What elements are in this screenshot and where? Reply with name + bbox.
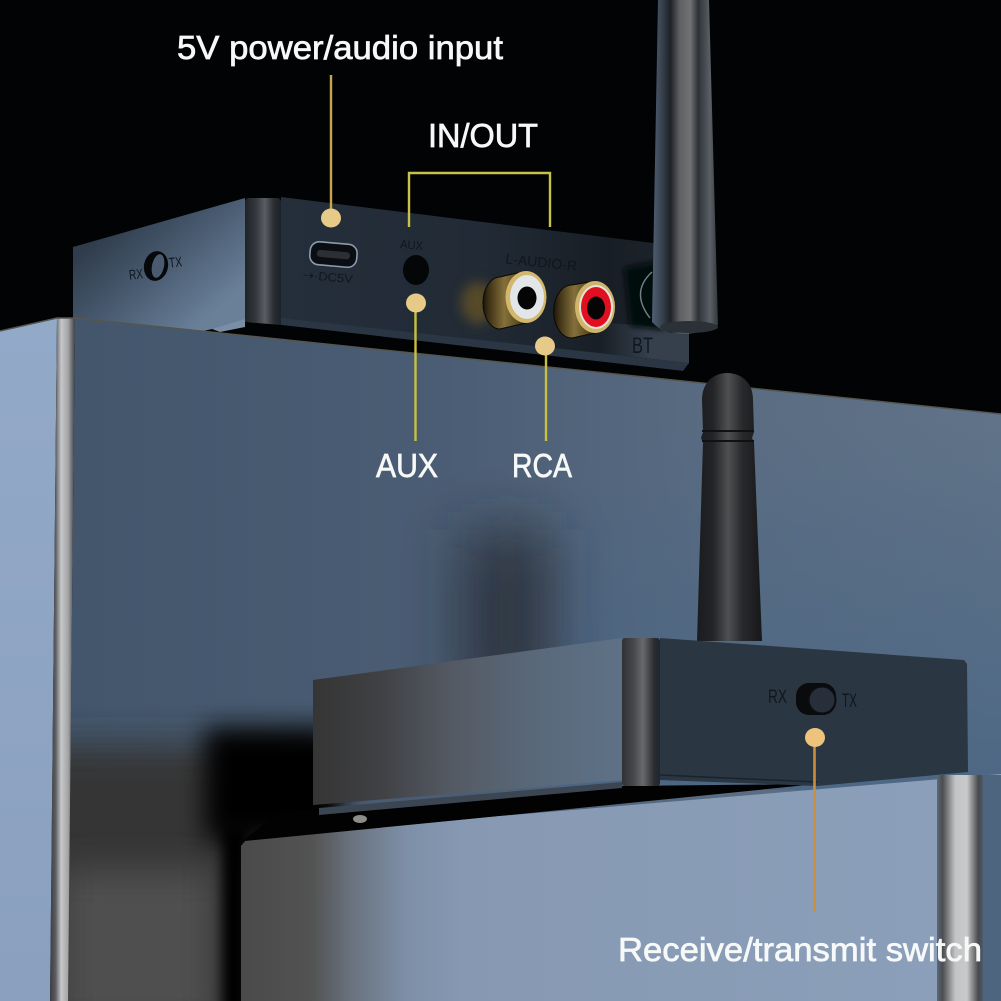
main shelf: bluer lower right tone — [560, 420, 1001, 790]
lower shelf: gap shadow — [241, 784, 817, 842]
top device: light lip at the corner — [212, 319, 245, 332]
top device: front face — [281, 197, 689, 370]
top device: BT label: BT — [632, 333, 653, 358]
top device: AUX jack — [403, 255, 429, 285]
callout: Receive/transmit switch — [618, 728, 982, 968]
top device: left side face — [73, 198, 245, 345]
lower device: box with RX/TX switch — [313, 638, 968, 823]
main shelf: left side panel — [0, 318, 57, 1001]
callout: 5V power/audio input — [177, 29, 503, 228]
main shelf: front face — [68, 318, 1001, 1001]
top device: contact shadow — [203, 322, 686, 384]
top device: RX/TX switch — [128, 249, 183, 283]
top device: AUX label: AUX — [399, 237, 424, 253]
lower shelf: right side strip — [983, 775, 1001, 1001]
top device: USB-C port — [309, 241, 358, 268]
top device: lighter lower-right area — [600, 322, 689, 363]
top device: right RCA socket (red) — [554, 281, 615, 338]
callout: 5V power/audio input: 5V power/audio input — [177, 29, 503, 66]
top device: BT antenna connector — [624, 260, 664, 330]
callout: IN/OUT bracket: IN/OUT — [428, 117, 538, 154]
lower device: RX label: RX — [768, 687, 787, 708]
callout: AUX: AUX — [376, 447, 438, 484]
lower device: front face — [660, 638, 968, 786]
lower device: corner strip — [622, 638, 660, 786]
top device: RX/TX switch: TX — [168, 253, 183, 271]
callout: IN/OUT bracket — [409, 117, 550, 227]
main shelf panel — [0, 318, 1001, 1001]
lower device: TX label: TX — [842, 691, 857, 712]
top device: rounded corner strip — [245, 198, 281, 328]
lower device: foot — [353, 815, 367, 823]
lower device: slide switch — [796, 683, 836, 715]
lower device: left side face — [313, 638, 622, 805]
callout: AUX — [376, 294, 438, 484]
top device: DC5V label: ⇢·DC5V — [302, 268, 354, 286]
main shelf: dark lower-left shadow — [20, 728, 340, 1001]
top device: audio box with ports — [73, 197, 689, 384]
main shelf: chrome vertical edge — [50, 318, 75, 1001]
main shelf: top edge highlight — [0, 318, 1001, 414]
lower shelf: front face — [241, 774, 1001, 1001]
callout: RCA — [512, 336, 572, 484]
lower device: bottom lip — [319, 782, 622, 815]
lower antenna — [697, 373, 762, 641]
lower device: front bottom edge — [660, 775, 817, 782]
top device: left RCA socket (white) — [461, 271, 546, 329]
top antenna — [652, 0, 718, 334]
callout: RCA: RCA — [512, 447, 572, 484]
top device: RX/TX switch: RX — [128, 265, 144, 283]
callout: Receive/transmit switch: Receive/transmit switch — [618, 931, 982, 968]
lower shelf panel — [241, 774, 1001, 1001]
top device: lower front lip — [281, 318, 689, 371]
lower shelf: chrome edge — [937, 775, 983, 1001]
main shelf: shadow behind lower device — [462, 530, 552, 710]
top device: L-AUDIO-R label: L-AUDIO-R — [505, 250, 578, 274]
